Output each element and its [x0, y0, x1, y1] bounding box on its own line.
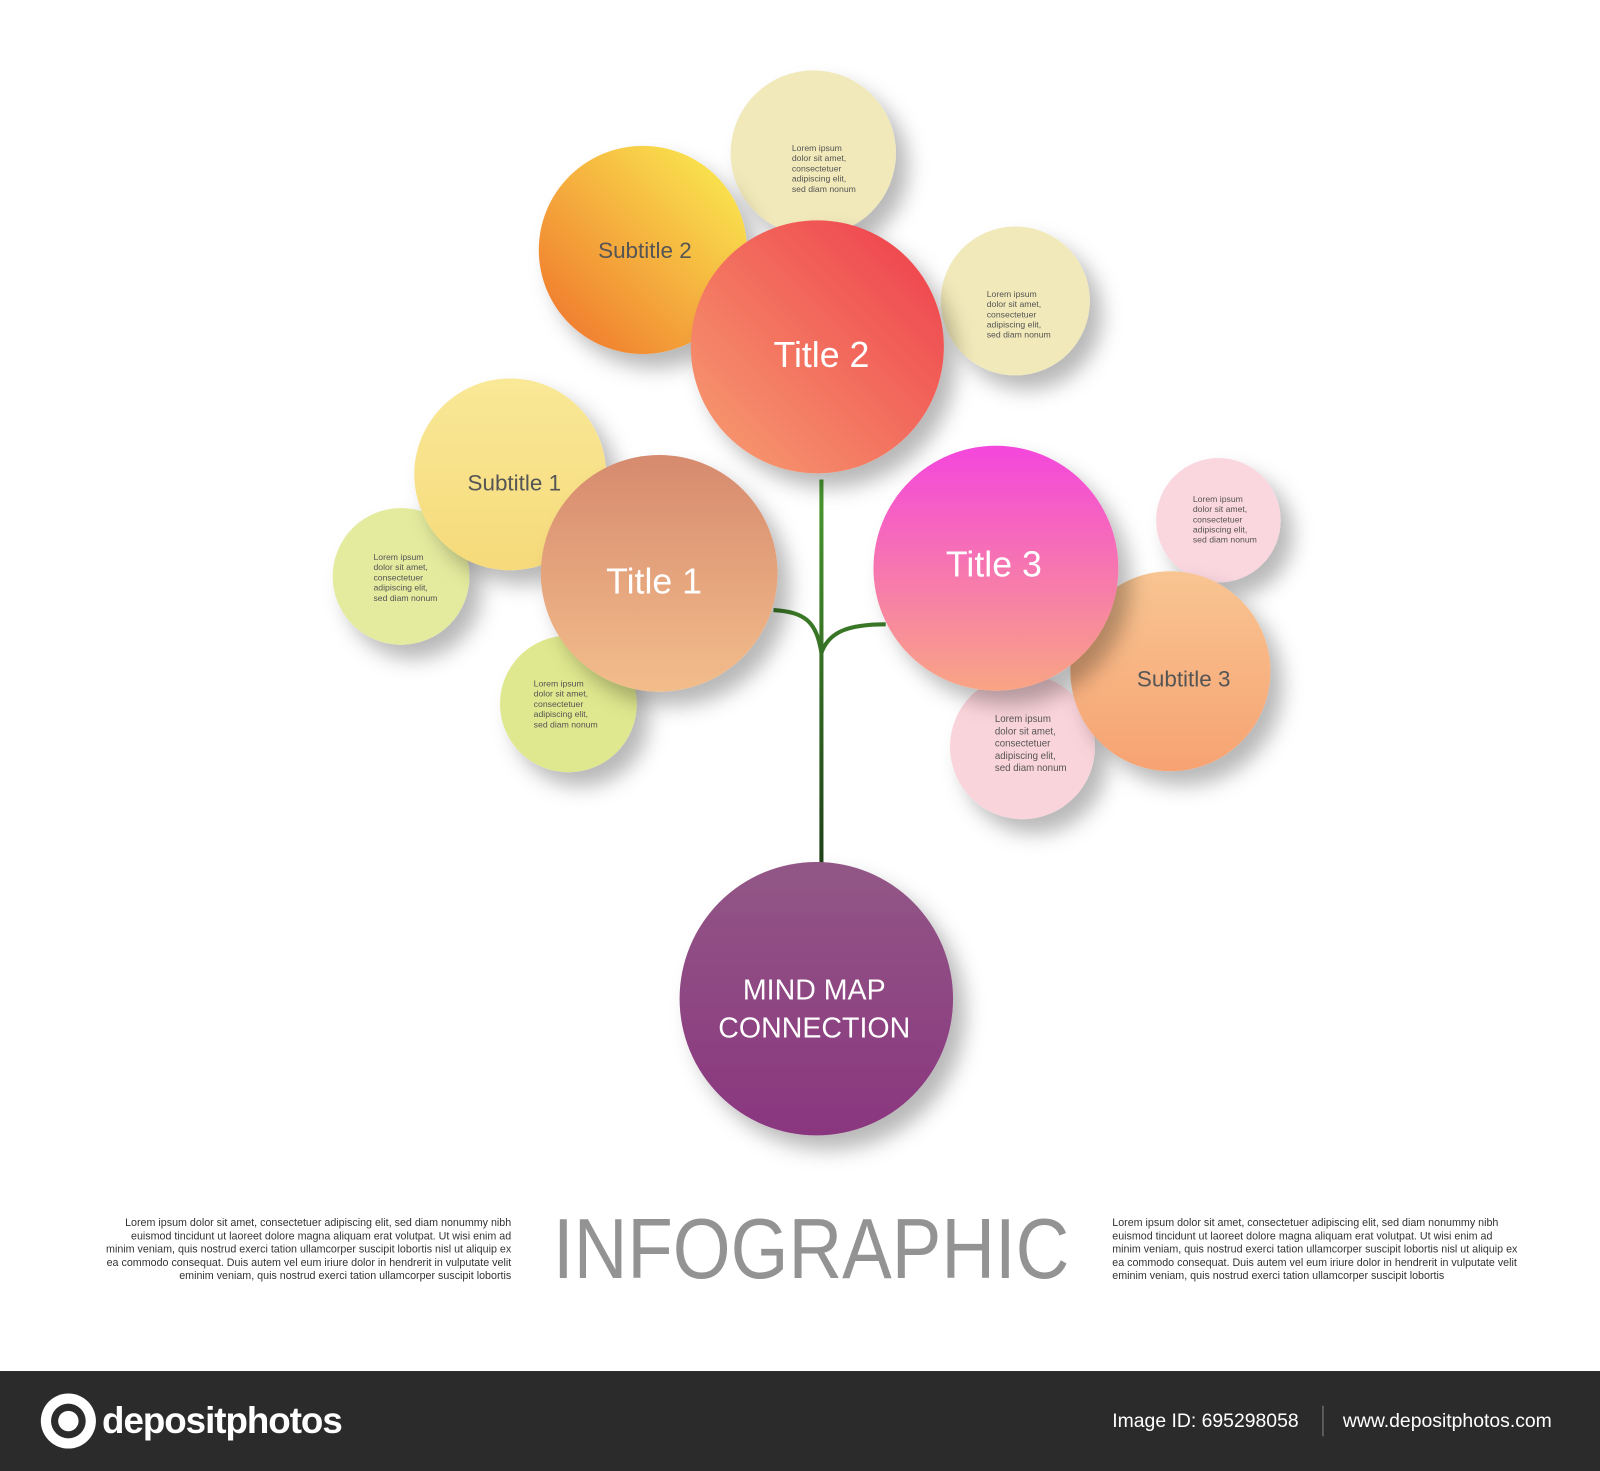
bubble: lorem pink bottom: Lorem ipsum — [995, 714, 1051, 725]
bubble: lorem pink right: sed diam nonum — [1193, 535, 1257, 545]
bubble: lorem left: dolor sit amet, — [373, 562, 428, 572]
bubble: lorem bottom left: Lorem ipsum — [534, 679, 584, 689]
bubble: subtitle 2: Subtitle 2 — [598, 238, 692, 263]
bubble: lorem bottom left: consectetuer — [534, 699, 583, 709]
bubble: title 1: Title 1 — [606, 562, 702, 602]
bubble: lorem pink right — [1156, 458, 1281, 582]
bubble: lorem top: sed diam nonum — [792, 184, 856, 194]
bubble: lorem bottom left: adipiscing elit, — [534, 709, 588, 719]
text block right — [1112, 1217, 1518, 1282]
footer bar: depositphotos — [102, 1400, 342, 1441]
bubble: lorem pink bottom: adipiscing elit, — [995, 751, 1056, 762]
bubble: title 2: Title 2 — [773, 335, 869, 375]
text block left: minim veniam, quis nostrud exerci tation ullamcorper suscipit lobortis nisl ut aliquip ex — [106, 1244, 512, 1256]
bubble: lorem pink right: dolor sit amet, — [1193, 504, 1247, 514]
bubble: subtitle 3 — [1070, 571, 1270, 771]
bubble: lorem left: Lorem ipsum — [373, 552, 424, 562]
bubble: lorem bottom left: dolor sit amet, — [534, 689, 588, 699]
bubble: subtitle 1: Subtitle 1 — [467, 471, 561, 496]
bubble: lorem pink bottom — [950, 674, 1095, 819]
text block right: Lorem ipsum dolor sit amet, consectetuer adipiscing elit, sed diam nonummy nibh — [1112, 1217, 1498, 1229]
text block right: ea commodo consequat. Duis autem vel eum iriure dolor in hendrerit in vulputate velit — [1112, 1257, 1517, 1269]
text block left: Lorem ipsum dolor sit amet, consectetuer adipiscing elit, sed diam nonummy nibh — [125, 1217, 511, 1229]
bubble: lorem left: sed diam nonum — [373, 593, 437, 603]
bubble: title 3 — [873, 446, 1118, 691]
bubble: lorem bottom left — [500, 636, 637, 772]
bubble: lorem pink bottom: sed diam nonum — [995, 763, 1067, 774]
bubble: lorem left: adipiscing elit, — [373, 583, 428, 593]
bubble: lorem top — [731, 70, 896, 236]
stem — [773, 479, 886, 865]
bubble: mind map connection — [680, 862, 953, 1135]
bubble: lorem pink right: Lorem ipsum — [1193, 494, 1243, 504]
bubble: lorem right — [941, 226, 1090, 375]
bubble: lorem right: Lorem ipsum — [987, 289, 1037, 299]
bubble: lorem right: consectetuer — [987, 309, 1036, 319]
footer bar: www.depositphotos.com — [1342, 1410, 1552, 1432]
bubble: lorem right: dolor sit amet, — [987, 299, 1041, 309]
icon: camera logo — [41, 1393, 96, 1449]
bubble: title 1 — [541, 455, 778, 692]
bubble: mind map connection: MIND MAP — [743, 975, 886, 1007]
bubble: title 3: Title 3 — [946, 544, 1042, 584]
bubble: lorem right: adipiscing elit, — [987, 319, 1041, 329]
bubble: title 2 — [691, 220, 944, 473]
text block right: eminim veniam, quis nostrud exerci tation ullamcorper suscipit lobortis — [1112, 1270, 1444, 1282]
footer bar: Image ID: 695298058 — [1112, 1410, 1299, 1432]
text block left — [106, 1217, 512, 1282]
bubble: lorem pink right: consectetuer — [1193, 514, 1243, 524]
text block left: ea commodo consequat. Duis autem vel eum iriure dolor in hendrerit in vulputate velit — [107, 1257, 511, 1269]
bubble: subtitle 2 — [539, 146, 747, 354]
bubble: lorem top: dolor sit amet, — [792, 153, 846, 163]
bubble: lorem left: consectetuer — [373, 572, 423, 582]
bubble: subtitle 1 — [414, 378, 606, 570]
bubble: lorem pink bottom: dolor sit amet, — [995, 726, 1056, 737]
bubble: lorem pink bottom: consectetuer — [995, 739, 1051, 750]
bubble: lorem pink right: adipiscing elit, — [1193, 524, 1247, 534]
text block right: euismod tincidunt ut laoreet dolore magna aliquam erat volutpat. Ut wisi enim ad — [1112, 1230, 1493, 1242]
bubble: lorem top: adipiscing elit, — [792, 174, 846, 184]
footer bar — [0, 1371, 1600, 1471]
bubble: lorem bottom left: sed diam nonum — [534, 719, 598, 729]
bubble: lorem right: sed diam nonum — [987, 330, 1051, 340]
bubble: lorem left — [333, 508, 469, 645]
text block right: minim veniam, quis nostrud exerci tation ullamcorper suscipit lobortis nisl ut aliquip ex — [1112, 1244, 1518, 1256]
text block left: euismod tincidunt ut laoreet dolore magna aliquam erat volutpat. Ut wisi enim ad — [131, 1230, 511, 1242]
text block left: eminim veniam, quis nostrud exerci tation ullamcorper suscipit lobortis — [179, 1270, 511, 1282]
bubble: lorem top: Lorem ipsum — [792, 143, 842, 153]
bubble: lorem top: consectetuer — [792, 163, 842, 173]
bubble: subtitle 3: Subtitle 3 — [1137, 667, 1230, 692]
bubble: mind map connection: CONNECTION — [718, 1012, 910, 1044]
heading: infographic: INFOGRAPHIC — [553, 1201, 1069, 1297]
